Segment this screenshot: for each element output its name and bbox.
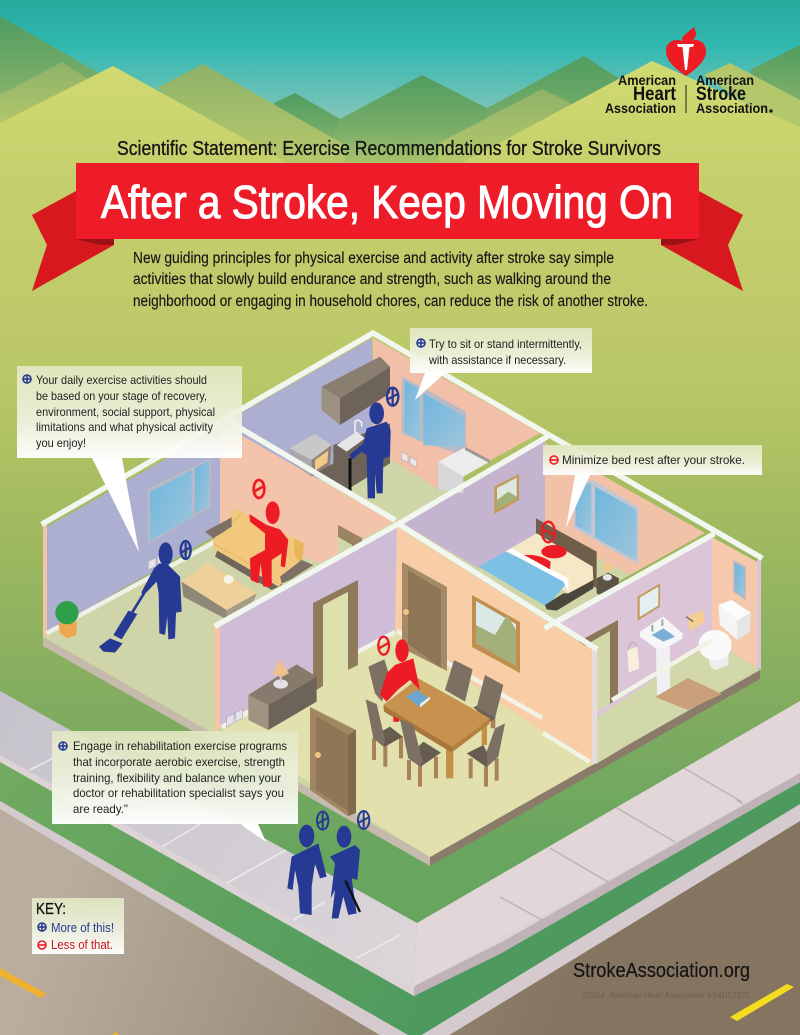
bathroom floor xyxy=(596,640,757,764)
book xyxy=(406,690,430,707)
intro paragraph: activities that slowly build endurance and strength, such as walking around the xyxy=(133,271,611,288)
logo text right: Association xyxy=(696,100,768,116)
table xyxy=(383,678,490,778)
sofa xyxy=(205,508,313,590)
callout: rehabilitation xyxy=(52,731,298,842)
person walking xyxy=(287,825,327,915)
bedroom and kitchen right side xyxy=(401,376,751,680)
sideboard xyxy=(248,664,317,730)
living room furniture xyxy=(47,458,313,653)
logo text right: American xyxy=(696,72,754,88)
kitchen floor xyxy=(330,447,437,518)
bathroom back wall xyxy=(556,537,712,718)
upper cabinets xyxy=(322,357,390,425)
icon: plus key xyxy=(38,923,46,931)
sky background xyxy=(0,0,800,180)
plant xyxy=(55,601,79,638)
kerb strip xyxy=(0,800,800,1035)
person vacuuming xyxy=(99,542,182,653)
bathroom wall end xyxy=(757,558,761,670)
front wall end xyxy=(214,625,220,732)
baseboards xyxy=(222,631,712,762)
callout text: doctor or rehabilitation specialist says you xyxy=(73,786,284,800)
chair front left xyxy=(366,699,403,767)
icon: plus bullet xyxy=(417,339,425,347)
outlets xyxy=(401,452,417,467)
door in peach wall xyxy=(402,562,447,671)
coffee table xyxy=(182,563,257,619)
intro paragraph: neighborhood or engaging in household chores, can reduce the risk of another stroke. xyxy=(133,293,648,310)
icon: minus xyxy=(254,480,264,498)
person sitting on sofa xyxy=(249,501,288,587)
callout text: Engage in rehabilitation exercise programs xyxy=(73,739,287,753)
person lying in bed xyxy=(524,545,567,569)
peach wall end xyxy=(592,648,597,765)
washing machine xyxy=(438,447,490,493)
intro paragraph: New guiding principles for physical exercise and activity after stroke say simple xyxy=(133,250,614,267)
icon: window xyxy=(148,458,211,544)
kitchen right wall xyxy=(373,338,540,490)
logo text left: American xyxy=(618,72,676,88)
callout: daily exercise xyxy=(17,366,242,552)
bedroom window xyxy=(574,480,638,565)
bedroom floor xyxy=(478,530,630,617)
chair front right xyxy=(467,723,505,787)
bathroom doorway xyxy=(578,620,618,712)
logo text right xyxy=(696,72,773,116)
walkers xyxy=(287,811,369,918)
peach wall xyxy=(395,527,592,765)
microwave xyxy=(289,434,332,477)
lower cabinets xyxy=(315,420,390,490)
person at table xyxy=(380,639,420,722)
more of this: More of this! xyxy=(51,920,114,935)
picture on bedroom wall xyxy=(494,474,519,514)
person in kitchen xyxy=(349,402,391,498)
chair back middle xyxy=(445,660,473,702)
website: StrokeAssociation.org xyxy=(573,959,750,982)
sink pedestal lower xyxy=(657,677,670,697)
logo text right: Stroke xyxy=(696,84,746,105)
callout text: environment, social support, physical xyxy=(36,405,215,419)
key legend xyxy=(32,898,124,954)
logo text left: Heart xyxy=(633,84,677,105)
bedroom lavender wall xyxy=(400,440,545,568)
road markings xyxy=(0,968,794,1035)
chair back right xyxy=(473,675,503,728)
outlets xyxy=(227,709,243,727)
person walking with cane xyxy=(330,826,360,918)
toilet xyxy=(698,600,751,670)
ribbon tails xyxy=(32,191,743,291)
icon: plus walker one xyxy=(317,812,328,830)
living room side wall xyxy=(220,423,393,563)
callout text: limitations and what physical activity xyxy=(36,420,213,434)
chair back left xyxy=(368,659,389,702)
dining floor xyxy=(220,632,592,857)
living room back wall xyxy=(47,423,228,632)
grass verge xyxy=(0,760,800,1035)
banner xyxy=(76,163,699,239)
icon: minus bed xyxy=(542,522,555,542)
icon: heart and torch xyxy=(666,27,706,76)
callout text: Minimize bed rest after your stroke. xyxy=(562,453,745,467)
bedroom pink wall xyxy=(545,443,705,575)
table lamp xyxy=(273,659,289,689)
doorway in lavender wall xyxy=(313,580,358,692)
callout text: with assistance if necessary. xyxy=(428,353,566,367)
kitchen back wall xyxy=(225,338,372,485)
bathroom mirror xyxy=(638,583,660,621)
towel xyxy=(627,642,639,673)
nightstand with lamp xyxy=(597,562,619,595)
toilet paper holder xyxy=(686,611,705,632)
floor slab xyxy=(43,447,760,866)
logo text left xyxy=(605,72,677,116)
road xyxy=(0,800,800,1035)
logo divider xyxy=(685,85,687,113)
bathroom right wall xyxy=(712,537,757,668)
icon: minus dining xyxy=(378,637,389,655)
wall tops xyxy=(44,333,760,648)
front door xyxy=(310,707,356,816)
kitchen xyxy=(289,357,390,490)
icon: plus xyxy=(181,541,191,559)
bathroom small window xyxy=(733,560,746,600)
sink xyxy=(640,617,683,680)
icon: plus bullet xyxy=(23,375,31,383)
icon: outlet xyxy=(148,553,165,570)
callout text: that incorporate aerobic exercise, strength xyxy=(73,755,285,769)
callout text: be based on your stage of recovery, xyxy=(36,389,207,403)
callout text: Try to sit or stand intermittently, xyxy=(429,337,582,351)
icon: plus bullet xyxy=(59,742,67,750)
logo xyxy=(605,27,773,116)
icon: minus bullet xyxy=(550,456,558,464)
callout: sit or stand xyxy=(410,328,592,400)
copyright: ©2014, American Heart Association 4/14DS7977 xyxy=(582,990,750,1000)
doorway to kitchen xyxy=(338,525,362,566)
callout text: Your daily exercise activities should xyxy=(36,373,207,387)
callout text: you enjoy! xyxy=(36,436,86,450)
house xyxy=(43,333,761,866)
left end of wall xyxy=(43,523,47,637)
less of that: Less of that. xyxy=(51,937,113,952)
callout text: are ready." xyxy=(73,802,128,816)
callout: bed rest xyxy=(543,445,762,528)
kitchen window xyxy=(402,376,466,457)
icon: plus walker two xyxy=(358,811,369,829)
mountains xyxy=(0,16,800,200)
logo text left: Association xyxy=(605,100,676,116)
chair front middle xyxy=(400,719,441,787)
icon: plus kitchen xyxy=(387,388,398,406)
framed landscape picture xyxy=(472,595,520,673)
bed xyxy=(478,518,597,611)
dining room xyxy=(227,637,505,787)
bath rug xyxy=(655,678,722,710)
callout text: training, flexibility and balance when your xyxy=(73,771,281,785)
icon: minus key xyxy=(38,941,46,949)
key title: KEY: xyxy=(36,901,66,918)
baseboard xyxy=(47,539,220,633)
front lavender wall xyxy=(220,527,397,727)
title: After a Stroke, Keep Moving On xyxy=(101,176,673,228)
subtitle: Scientific Statement: Exercise Recommendations for Stroke Survivors xyxy=(117,138,661,160)
sidewalk xyxy=(0,691,800,996)
